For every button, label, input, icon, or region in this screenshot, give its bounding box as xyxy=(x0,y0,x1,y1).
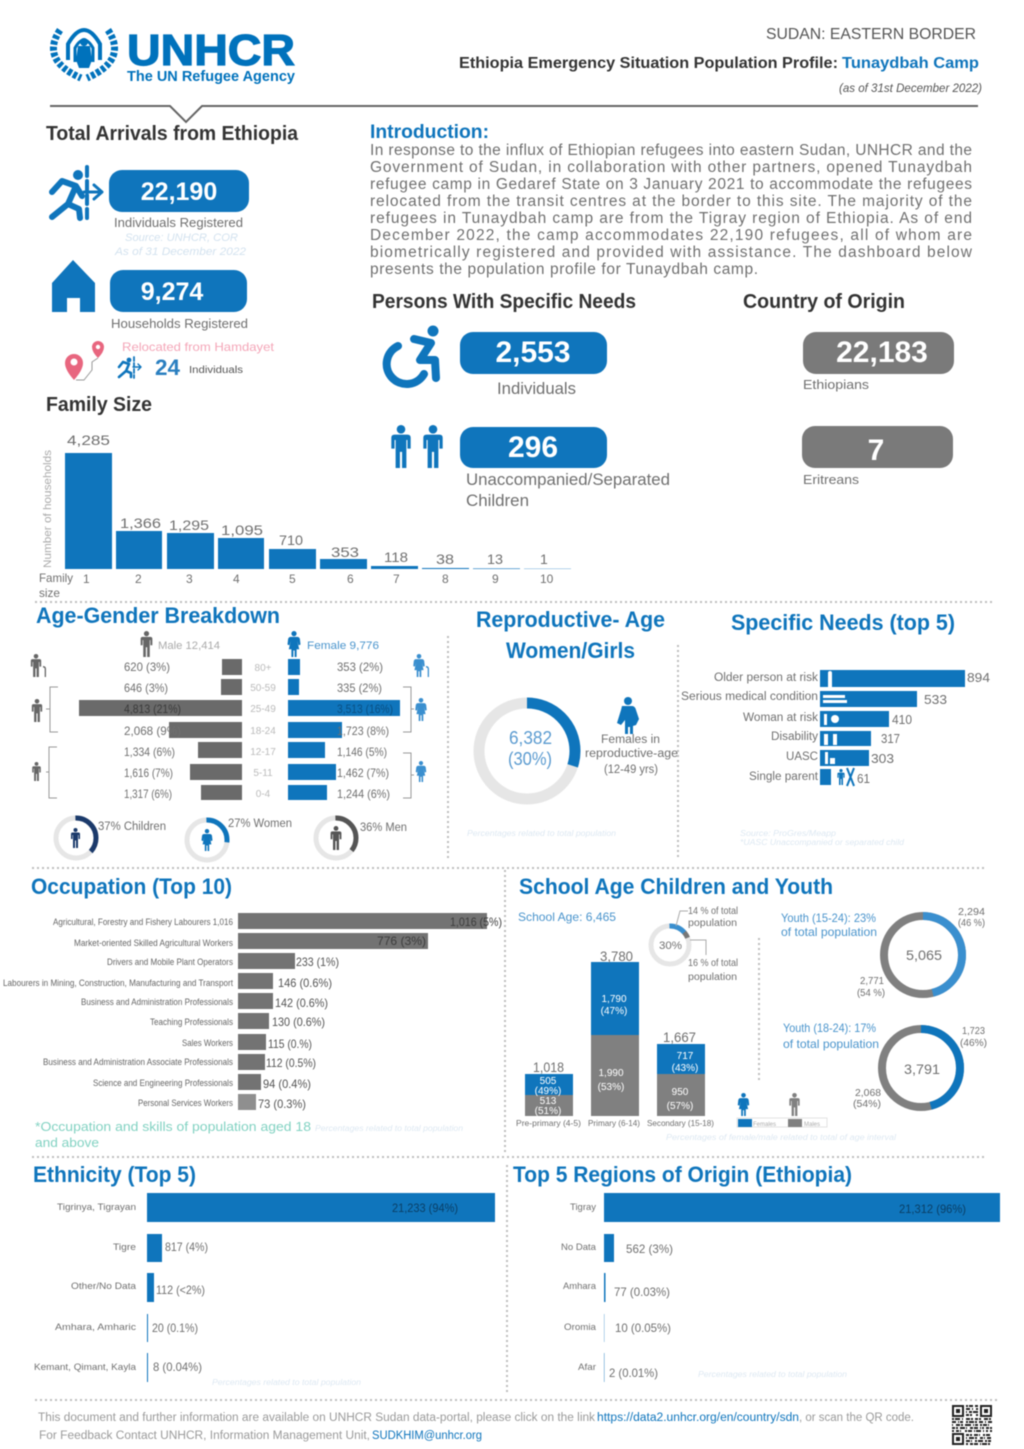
panel: total arrivals xyxy=(46,123,299,380)
youth 18-24 label: of total population xyxy=(783,1037,879,1051)
category axis: 9 xyxy=(492,572,499,586)
QR code xyxy=(952,1406,992,1444)
footer: data portal and contact: , or scan the QR code. xyxy=(799,1412,914,1424)
panel: reproductive-age women/girls xyxy=(467,607,678,838)
panel: persons with specific needs xyxy=(372,291,670,510)
values: specific needs: 317 xyxy=(881,731,900,746)
stacked bar categories: Pre-primary (4-5) xyxy=(516,1118,581,1128)
donut: school age share: 14 % of total xyxy=(688,906,738,917)
values: ethnicity: 21,233 (94%) xyxy=(392,1201,458,1215)
ring chart: youth 15-24: (46 %) xyxy=(958,918,985,929)
values: regions: 21,312 (96%) xyxy=(899,1202,966,1216)
labels: regions xyxy=(561,1202,597,1373)
labels: occupation: Drivers and Mobile Plant Operators xyxy=(107,957,233,967)
stat: individuals with needs xyxy=(460,332,607,398)
heading: school age: School Age Children and Youth xyxy=(519,874,833,899)
stat: individuals registered: Individuals Registered xyxy=(114,216,243,230)
donut: men: 36% Men xyxy=(360,822,407,834)
category axis: 1 xyxy=(83,572,90,586)
bar chart: family size xyxy=(65,453,571,569)
footer: data portal and contact: This document and further information are available on UNHCR Sudan data-portal, please click on the link xyxy=(38,1412,595,1424)
youth 15-24 label xyxy=(781,911,877,939)
footnote: occupation: *Occupation and skills of population aged 18 xyxy=(35,1119,311,1134)
heading: total arrivals: Total Arrivals from Ethiopia xyxy=(46,123,299,145)
youth 15-24 label: of total population xyxy=(781,925,877,939)
stacked bar values: (43%) xyxy=(672,1063,698,1074)
heading: occupation: Occupation (Top 10) xyxy=(31,874,232,899)
stacked bar categories: Primary (6-14) xyxy=(588,1118,640,1128)
bar values: 13 xyxy=(487,551,503,567)
pyramid: female values: 1,244 (6%) xyxy=(337,787,390,801)
donut: school age share: 16 % of total xyxy=(688,958,738,969)
panel: introduction xyxy=(370,122,973,278)
donut: men xyxy=(316,818,407,858)
header: report title: Ethiopia Emergency Situation Population Profile: xyxy=(459,55,838,72)
note: regions percentages: Percentages related to total population xyxy=(698,1370,848,1379)
stacked bar values: 513 xyxy=(540,1096,557,1107)
pyramid: male bars xyxy=(79,659,242,800)
stat: individuals registered: As of 31 December 2022 xyxy=(114,246,246,258)
values: regions xyxy=(609,1202,966,1380)
pyramid: male values: 646 (3%) xyxy=(124,681,168,695)
category axis: 2 xyxy=(135,572,142,586)
labels: occupation: Business and Administration Professionals xyxy=(81,997,233,1007)
values: specific needs: 303 xyxy=(871,751,894,766)
heading: country of origin: Country of Origin xyxy=(743,291,905,313)
labels: occupation: Teaching Professionals xyxy=(150,1017,233,1027)
footnote: occupation: and above xyxy=(35,1135,99,1150)
values: occupation: 130 (0.6%) xyxy=(272,1015,325,1029)
stat: Eritreans: Eritreans xyxy=(803,472,860,487)
bars: regions xyxy=(604,1193,1000,1382)
bar values: 118 xyxy=(384,549,408,565)
donut: children xyxy=(56,818,166,858)
ring chart: youth 18-24 xyxy=(853,1026,987,1110)
stat: individuals registered: 22,190 xyxy=(141,178,217,206)
pyramid: female values: 335 (2%) xyxy=(337,681,382,695)
labels: ethnicity: Tigrinya, Tigrayan xyxy=(57,1202,136,1213)
values: occupation: 146 (0.6%) xyxy=(278,976,332,990)
pyramid: male values: 1,317 (6%) xyxy=(124,787,172,801)
footer: data portal and contact xyxy=(38,1412,914,1442)
footer: data portal and contact: https://data2.unhcr.org/en/country/sdn xyxy=(597,1412,799,1424)
legend: female total: Female 9,776 xyxy=(307,640,379,652)
youth 18-24 label: Youth (18-24): 17% xyxy=(783,1021,876,1035)
note: percentages: Percentages related to total population xyxy=(467,829,617,838)
stat: individuals registered: Source: UNHCR, COR xyxy=(125,232,238,244)
stat: unaccompanied children: 296 xyxy=(508,431,558,464)
labels: ethnicity: Tigre xyxy=(113,1242,136,1253)
donut: women xyxy=(187,818,292,860)
labels: ethnicity: Amhara, Amharic xyxy=(55,1322,136,1333)
heading: family size: Family Size xyxy=(46,394,152,416)
stacked bar values: 950 xyxy=(672,1087,689,1098)
icon: wheelchair xyxy=(387,326,438,384)
footer: data portal and contact: SUDKHIM@unhcr.org xyxy=(372,1430,482,1442)
pyramid: age labels: 5-11 xyxy=(253,768,273,779)
icon: female adult with bracket xyxy=(403,687,427,732)
donut: school age share: 30% xyxy=(659,940,682,952)
heading: reproductive age: Women/Girls xyxy=(506,638,635,663)
y axis label: Number of households xyxy=(42,449,54,568)
labels: specific needs xyxy=(681,672,819,783)
values: occupation: 776 (3%) xyxy=(377,934,426,948)
icon: female child with bracket xyxy=(403,753,426,798)
legend: female total xyxy=(288,631,379,657)
icon: small person crossing xyxy=(119,357,141,378)
category axis: Family xyxy=(39,571,73,585)
stat: Eritreans xyxy=(802,426,953,487)
pyramid: male values: 620 (3%) xyxy=(124,660,170,674)
stacked bar values: 1,990 xyxy=(598,1068,624,1079)
bar values: 1,095 xyxy=(221,522,263,538)
labels: specific needs: Serious medical condition xyxy=(681,691,818,703)
stacked bar values: 1,018 xyxy=(533,1059,564,1075)
values: specific needs: 533 xyxy=(924,692,947,707)
ring chart: youth 18-24: (54%) xyxy=(853,1099,881,1110)
labels: specific needs: Single parent xyxy=(749,771,819,783)
legend: females and males xyxy=(737,1093,827,1128)
label: females in reproductive age: reproductive-age xyxy=(585,748,678,760)
stat: unaccompanied children: Children xyxy=(466,491,529,510)
stat: households registered: 9,274 xyxy=(141,278,203,306)
ring chart: youth 18-24: (46%) xyxy=(960,1038,987,1049)
label: females in reproductive age xyxy=(585,734,678,776)
category axis: 8 xyxy=(442,572,449,586)
labels: regions: Oromia xyxy=(564,1322,597,1333)
stacked bar values: 1,790 xyxy=(601,994,627,1005)
stacked bar values: (57%) xyxy=(667,1101,693,1112)
labels: occupation: Labourers in Mining, Construction, Manufacturing and Transport xyxy=(3,978,233,988)
header: report title: (as of 31st December 2022) xyxy=(839,81,982,95)
icon: male adult with bracket xyxy=(32,687,58,732)
pyramid: male values: 4,813 (21%) xyxy=(124,702,181,716)
panel: age-gender breakdown xyxy=(31,603,429,860)
panel: specific needs top 5 xyxy=(681,610,990,847)
stacked bars: school enrolment age xyxy=(525,962,705,1116)
stat: individuals with needs: 2,553 xyxy=(495,336,571,369)
bar values xyxy=(67,432,548,567)
heading: introduction: Introduction: xyxy=(370,122,489,143)
icon: male child with bracket xyxy=(32,747,57,798)
stat: unaccompanied children xyxy=(460,427,670,510)
values: occupation: 115 (0.%) xyxy=(268,1037,312,1051)
panel: ethnicity xyxy=(33,1162,495,1387)
label: school age total: School Age: 6,465 xyxy=(518,910,616,924)
ring chart: youth 18-24: 3,791 xyxy=(904,1061,940,1077)
stacked bar values: (51%) xyxy=(535,1106,561,1117)
stat: households registered: Households Registered xyxy=(111,317,248,331)
donut: women: 27% Women xyxy=(228,818,292,830)
values: ethnicity: 20 (0.1%) xyxy=(152,1321,198,1335)
pyramid: female values: 1,462 (7%) xyxy=(337,766,389,780)
bars: occupation xyxy=(238,913,487,1110)
relocated from Hamdayet: Relocated from Hamdayet xyxy=(122,340,275,354)
footer: data portal and contact: For Feedback Contact UNHCR, Information Management Unit, xyxy=(39,1430,370,1442)
pyramid: female values: 1,723 (8%) xyxy=(337,724,389,738)
icon: person crossing border xyxy=(52,167,102,220)
pyramid: age labels: 25-49 xyxy=(250,704,276,715)
labels: occupation: Science and Engineering Professionals xyxy=(93,1078,233,1088)
values: ethnicity xyxy=(152,1201,458,1374)
ring chart: youth 15-24 xyxy=(857,907,985,999)
icon: pregnant woman xyxy=(617,697,639,734)
icon: relocation route pins xyxy=(65,341,104,380)
icon: female elder xyxy=(413,654,429,677)
values: specific needs: 894 xyxy=(967,670,990,685)
logo tagline: The UN Refugee Agency xyxy=(127,68,296,85)
relocated from Hamdayet xyxy=(119,340,275,380)
labels: occupation: Personal Services Workers xyxy=(138,1098,233,1108)
category axis: size xyxy=(39,586,60,600)
note: school age percentages: Percentages of female/male related to total of age interval xyxy=(666,1133,896,1142)
values: occupation xyxy=(258,915,502,1111)
labels: occupation: Sales Workers xyxy=(182,1038,233,1048)
heading: specific needs: Specific Needs (top 5) xyxy=(731,610,955,635)
labels: occupation: Agricultural, Forestry and Fishery Labourers 1,016 xyxy=(53,917,233,927)
introduction paragraph: presents the population profile for Tunaydbah camp. xyxy=(370,261,758,278)
pyramid: female values xyxy=(337,660,393,801)
pyramid: male values: 2,068 (9%) xyxy=(124,724,181,738)
donut: reproductive age: 6,382 xyxy=(509,728,552,748)
category axis: 7 xyxy=(393,572,400,586)
category axis: 3 xyxy=(186,572,193,586)
labels: regions: Amhara xyxy=(563,1281,597,1292)
footnote: occupation xyxy=(35,1119,464,1150)
category axis: 6 xyxy=(347,572,354,586)
ring chart: youth 18-24: 1,723 xyxy=(962,1026,985,1037)
stat: individuals with needs: Individuals xyxy=(497,379,576,398)
values: regions: 77 (0.03%) xyxy=(614,1285,670,1299)
panel: family size xyxy=(39,394,571,600)
bar icons xyxy=(823,671,847,764)
bar values: 1,366 xyxy=(120,515,161,531)
introduction paragraph: December 2022, the camp accommodates 22,190 refugees, all of whom are xyxy=(370,227,972,244)
values: occupation: 1,016 (5%) xyxy=(450,915,502,929)
header: report title: SUDAN: EASTERN BORDER xyxy=(766,26,976,43)
legend: male total xyxy=(141,631,220,657)
stacked bar values: 3,780 xyxy=(600,948,633,964)
ring chart: youth 15-24: 2,294 xyxy=(958,907,985,918)
pyramid: age labels: 50-59 xyxy=(250,683,276,694)
values: regions: 2 (0.01%) xyxy=(609,1366,658,1380)
note: source: *UASC Unaccompanied or separated child xyxy=(740,838,905,847)
values: ethnicity: 112 (<2%) xyxy=(156,1283,205,1297)
values: occupation: 73 (0.3%) xyxy=(258,1097,306,1111)
bar values: 353 xyxy=(331,544,359,560)
legend: male total: Male 12,414 xyxy=(158,640,220,652)
labels: specific needs: Disability xyxy=(771,731,818,743)
header: report title: Tunaydbah Camp xyxy=(842,55,979,72)
header: report title xyxy=(459,26,982,95)
introduction paragraph: biometrically registered and provided with assistance. The dashboard below xyxy=(370,244,973,261)
pyramid: age labels: 18-24 xyxy=(250,726,276,737)
icon: house xyxy=(52,260,95,312)
values: occupation: 233 (1%) xyxy=(296,955,339,969)
pyramid: female values: 1,146 (5%) xyxy=(337,745,387,759)
panel: school age children and youth xyxy=(516,874,987,1142)
donut: reproductive age: (30%) xyxy=(508,749,552,769)
ring chart: youth 15-24: 2,771 xyxy=(860,976,884,987)
values: occupation: 142 (0.6%) xyxy=(275,996,328,1010)
stacked bar values: 717 xyxy=(677,1051,694,1062)
legend: females and males: Females xyxy=(753,1122,776,1128)
stat: Ethiopians: Ethiopians xyxy=(803,377,870,392)
stat: Ethiopians: 22,183 xyxy=(836,336,928,369)
relocated from Hamdayet: 24 xyxy=(155,355,181,380)
pyramid: age labels: 12-17 xyxy=(250,747,276,758)
introduction paragraph: Government of Sudan, in collaboration with other partners, opened Tunaydbah xyxy=(370,159,972,176)
stacked bar values: (49%) xyxy=(535,1086,561,1097)
heading: persons with specific needs: Persons With Specific Needs xyxy=(372,291,636,313)
bar values: 38 xyxy=(436,551,454,567)
stacked bar values: 505 xyxy=(540,1076,557,1087)
header: UNHCR logo xyxy=(53,26,296,85)
values: specific needs: 410 xyxy=(892,712,912,727)
icon: two children xyxy=(391,425,443,468)
note: ethnicity percentages: Percentages related to total population xyxy=(212,1378,362,1387)
heading: reproductive age: Reproductive- Age xyxy=(476,607,665,632)
youth 18-24 label xyxy=(783,1021,879,1051)
pyramid: male values: 1,616 (7%) xyxy=(124,766,173,780)
note: source: Source: ProGres/Meapp xyxy=(740,829,837,838)
panel: regions of origin xyxy=(513,1162,1000,1382)
introduction paragraph xyxy=(370,142,973,278)
labels: regions: Afar xyxy=(578,1362,596,1373)
introduction paragraph: In response to the influx of Ethiopian refugees into eastern Sudan, UNHCR and the xyxy=(370,142,972,159)
values: specific needs xyxy=(857,670,990,786)
labels: occupation: Market-oriented Skilled Agricultural Workers xyxy=(74,938,233,948)
ring chart: youth 15-24: 5,065 xyxy=(906,947,942,963)
heading: regions of origin: Top 5 Regions of Origin (Ethiopia) xyxy=(513,1162,852,1187)
bars: specific needs xyxy=(820,670,965,785)
heading: age-gender breakdown: Age-Gender Breakdown xyxy=(36,603,280,628)
labels: ethnicity xyxy=(34,1202,137,1373)
introduction paragraph: refugee camp in Gedaref State on 3 January 2021 to accommodate the refugees xyxy=(370,176,972,193)
header divider with notch xyxy=(50,106,978,122)
category axis: 4 xyxy=(233,572,240,586)
stat: Ethiopians xyxy=(803,332,954,392)
pyramid: age labels xyxy=(250,663,276,800)
pyramid: age labels: 0-4 xyxy=(256,789,271,800)
logo wordmark: UNHCR xyxy=(127,26,295,75)
labels: regions: Tigray xyxy=(570,1202,596,1213)
labels: occupation: Business and Administration Associate Professionals xyxy=(43,1057,233,1067)
stat: households registered xyxy=(110,270,248,331)
pyramid: age labels: 80+ xyxy=(255,663,272,674)
values: ethnicity: 8 (0.04%) xyxy=(153,1360,202,1374)
stacked bar values: 1,667 xyxy=(663,1029,696,1045)
bars: ethnicity xyxy=(147,1193,495,1382)
values: regions: 10 (0.05%) xyxy=(615,1321,671,1335)
category axis xyxy=(39,571,554,600)
values: occupation: 94 (0.4%) xyxy=(263,1077,311,1091)
stat: Eritreans: 7 xyxy=(868,434,884,467)
legend: females and males: Males xyxy=(804,1122,820,1128)
donut: school age share: population xyxy=(688,972,737,983)
stacked bar values xyxy=(533,948,698,1117)
panel: occupation xyxy=(3,874,502,1150)
bar values: 4,285 xyxy=(67,432,110,448)
labels: ethnicity: Other/No Data xyxy=(71,1281,137,1292)
panel: country of origin xyxy=(743,291,954,487)
labels: specific needs: UASC xyxy=(786,751,818,763)
ring chart: youth 15-24: (54 %) xyxy=(857,988,885,999)
heading: ethnicity: Ethnicity (Top 5) xyxy=(33,1162,196,1187)
pyramid: male values xyxy=(124,660,181,801)
heading: reproductive age xyxy=(476,607,665,663)
category axis: 10 xyxy=(540,572,554,586)
icon: single parent xyxy=(837,768,854,786)
bar values: 710 xyxy=(279,532,303,548)
pyramid: female values: 353 (2%) xyxy=(337,660,383,674)
stacked bar categories: Secondary (15-18) xyxy=(647,1118,714,1128)
donut: children: 37% Children xyxy=(98,821,166,833)
ring chart: youth 18-24: 2,068 xyxy=(855,1088,881,1099)
pyramid: female bars xyxy=(288,659,400,800)
values: ethnicity: 817 (4%) xyxy=(165,1240,208,1254)
donut: school age share xyxy=(643,906,738,983)
relocated from Hamdayet: Individuals xyxy=(189,365,243,376)
note: source xyxy=(740,829,905,847)
pyramid: female values: 3,513 (16%) xyxy=(337,702,393,716)
youth 15-24 label: Youth (15-24): 23% xyxy=(781,911,876,925)
labels: ethnicity: Kemant, Qimant, Kayla xyxy=(34,1362,137,1373)
stacked bar values: (47%) xyxy=(601,1006,627,1017)
pyramid: male values: 1,334 (6%) xyxy=(124,745,175,759)
introduction paragraph: refugees in Tunaydbah camp are from the Tigray region of Ethiopia. As of end xyxy=(370,210,972,227)
introduction paragraph: relocated from the transit centres at the border to this site. The majority of the xyxy=(370,193,972,210)
labels: specific needs: Older person at risk xyxy=(714,672,818,684)
stat: unaccompanied children: Unaccompanied/Separated xyxy=(466,470,670,489)
stacked bar values: (53%) xyxy=(598,1082,624,1093)
stacked bar categories xyxy=(516,1118,714,1128)
values: specific needs: 61 xyxy=(857,771,870,786)
labels: specific needs: Woman at risk xyxy=(743,712,818,724)
labels: occupation xyxy=(3,917,233,1108)
category axis: 5 xyxy=(289,572,296,586)
label: females in reproductive age: Females in xyxy=(601,734,660,746)
icon: male elder xyxy=(31,654,46,677)
footnote: occupation: Percentages related to total population xyxy=(315,1124,464,1133)
bar values: 1 xyxy=(540,551,548,567)
logo emblem xyxy=(53,30,115,78)
label: females in reproductive age: (12-49 yrs) xyxy=(604,764,658,776)
values: occupation: 112 (0.5%) xyxy=(266,1056,316,1070)
values: regions: 562 (3%) xyxy=(626,1242,673,1256)
stat: individuals registered xyxy=(109,170,249,258)
bar values: 1,295 xyxy=(169,517,209,533)
labels: regions: No Data xyxy=(561,1242,597,1253)
donut: school age share: population xyxy=(688,918,737,929)
donut: reproductive age xyxy=(479,703,575,799)
